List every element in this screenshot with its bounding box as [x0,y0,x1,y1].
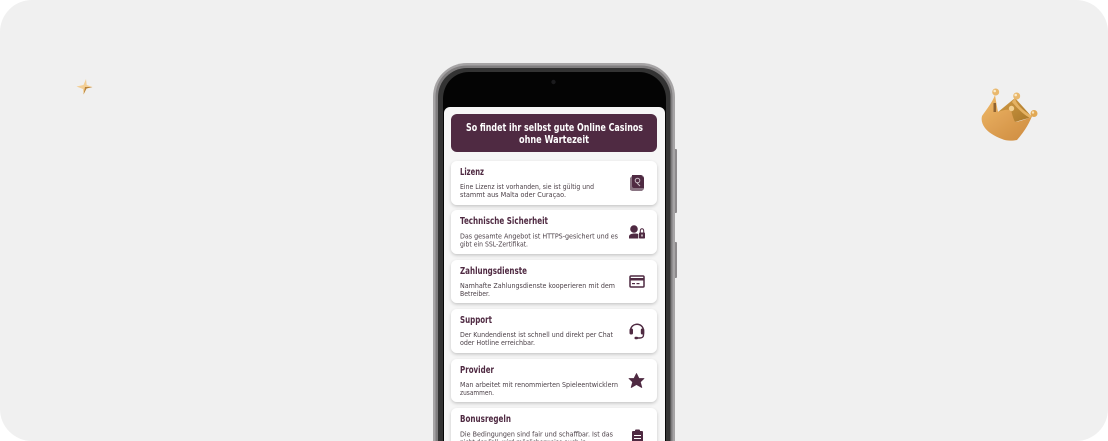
screen content panel [444,107,665,441]
card: Provider [451,359,657,402]
card: Provider: zusammen. [460,389,494,397]
card: Technische Sicherheit: gibt ein SSL-Zertifikat. [460,240,528,248]
icon: sparkle [76,79,92,94]
camera [551,80,556,84]
icon: golden crown [982,88,1038,141]
phone [433,63,677,441]
phone frame [433,63,675,441]
icon: credit card [630,276,644,287]
icon: user with lock [629,225,645,238]
card: Support: oder Hotline erreichbar. [460,339,535,347]
card: Provider: Man arbeitet mit renommierten Spieleentwicklern [460,381,618,389]
card: Technische Sicherheit [451,210,657,254]
icon: clipboard [632,430,643,441]
card: Support [451,309,657,353]
card: Lizenz [451,161,657,205]
heading banner: ohne Wartezeit [519,134,589,146]
icon: star [629,374,644,388]
card: Bonusregeln: Die Bedingungen sind fair und schaffbar. Ist das [460,430,614,438]
card: Support: Support [460,315,492,326]
card: Zahlungsdienste: Namhafte Zahlungsdienste kooperieren mit dem [460,282,615,290]
card: Bonusregeln [451,408,657,441]
card: Lizenz: Eine Lizenz ist vorhanden, sie ist gültig und [460,183,594,191]
card: Technische Sicherheit: Das gesamte Angebot ist HTTPS-gesichert und es [460,232,619,240]
card: Bonusregeln: Bonusregeln [460,414,511,425]
card: Technische Sicherheit: Technische Sicherheit [460,216,548,227]
card: Zahlungsdienste [451,260,657,303]
card: Lizenz: Lizenz [460,167,484,178]
heading banner: So findet ihr selbst gute Online Casinos [466,122,643,134]
heading banner [451,114,657,152]
card: Zahlungsdienste: Zahlungsdienste [460,266,527,277]
card: Lizenz: stammt aus Malta oder Curaçao. [460,191,566,199]
phone screen bezel [443,72,666,441]
phone side buttons [673,149,677,278]
icon: licence document [630,175,644,191]
card: Provider: Provider [460,365,494,376]
card: Support: Der Kundendienst ist schnell und direkt per Chat [460,331,613,339]
card: Zahlungsdienste: Betreiber. [460,290,490,298]
icon: headset [630,324,644,339]
